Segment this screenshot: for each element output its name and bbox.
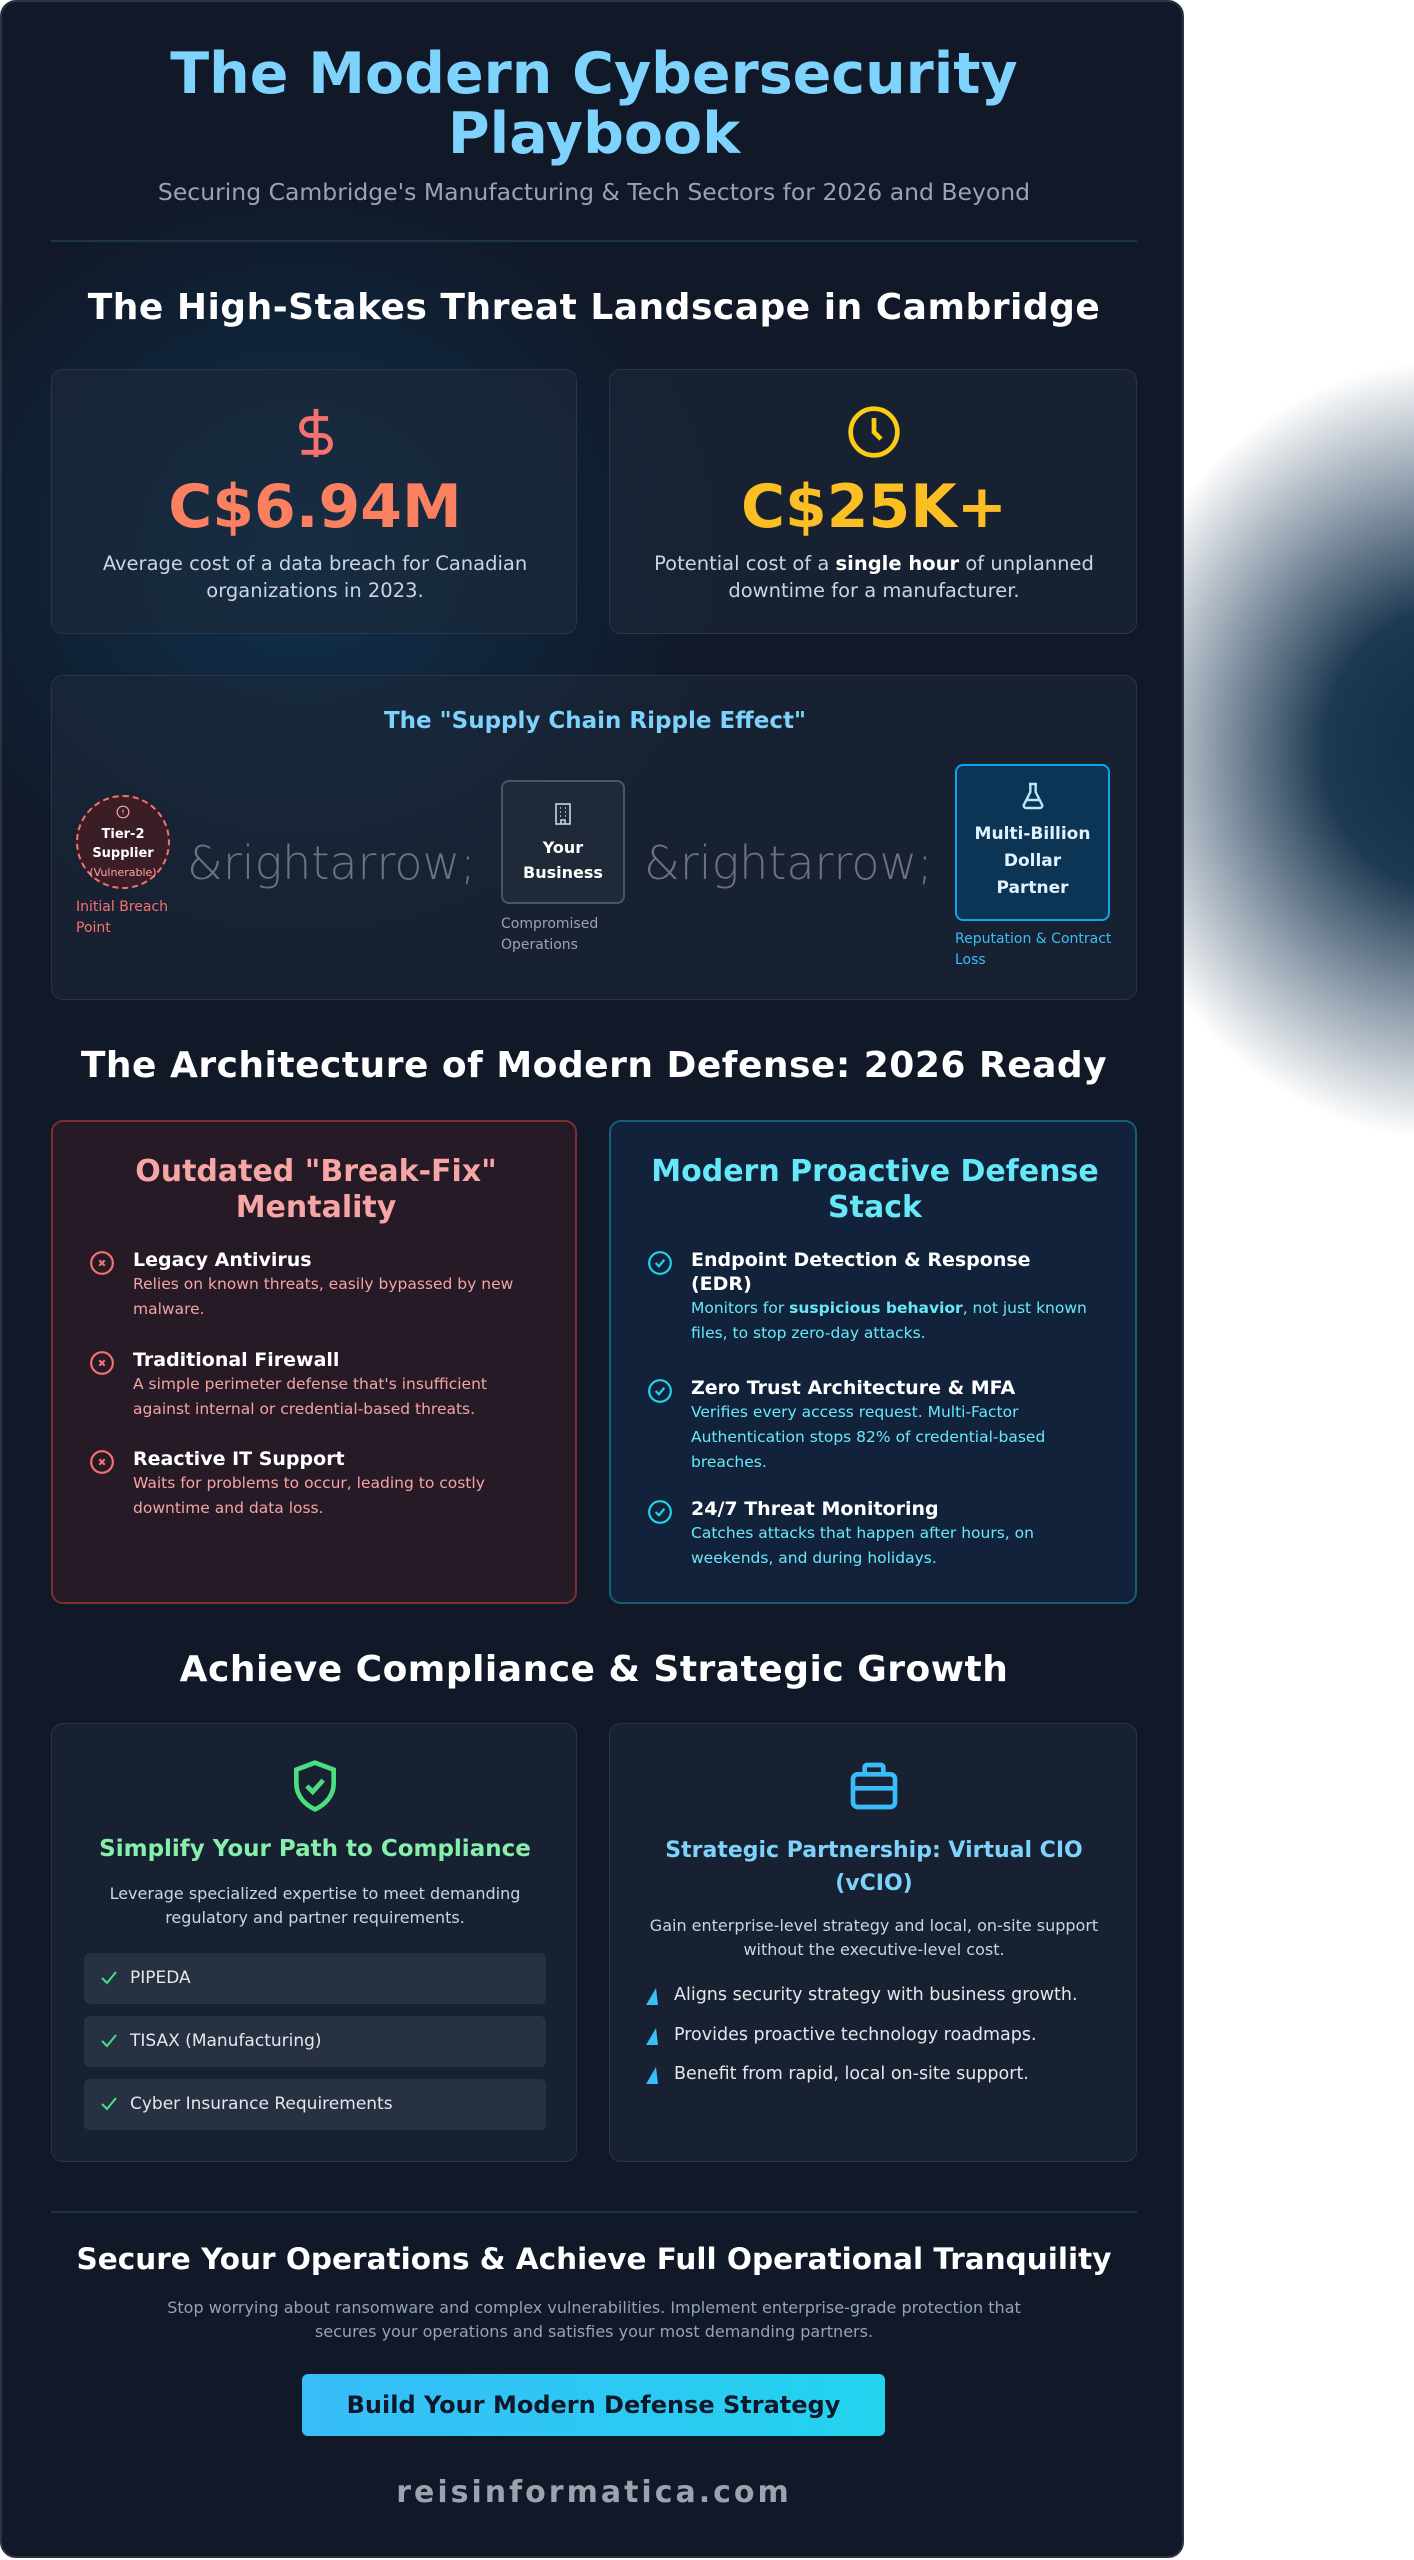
- description: [110, 1884, 520, 1927]
- item: reactive IT: Waits for problems to occur, leading to costly downtime and data loss.: [133, 1474, 485, 1517]
- caption: Reputation & Contract: [955, 931, 1111, 947]
- panel title: Stack: [828, 1190, 922, 1225]
- arrow: &rightarrow;: [187, 836, 476, 890]
- item: reactive IT: [90, 1448, 485, 1517]
- panel: supply chain ripple: [51, 675, 1137, 1000]
- description: Gain enterprise-level strategy and local, on-site support: [650, 1916, 1098, 1935]
- panel: compliance: [51, 1723, 577, 2162]
- CTA button: Build Your Modern Defense Strategy: [347, 2391, 840, 2419]
- panel title: [665, 1838, 1083, 1896]
- caption: [76, 899, 168, 936]
- node: partner: [955, 764, 1110, 921]
- caption: [501, 916, 598, 953]
- caption: Loss: [955, 952, 986, 968]
- node: supplier: Tier-2: [102, 827, 144, 842]
- panel title: (vCIO): [835, 1871, 913, 1896]
- stat number: C$6.94M: [168, 472, 462, 542]
- node: your business: Business: [523, 863, 603, 882]
- icon: clock: [848, 406, 900, 458]
- item: traditional firewall: A simple perimeter defense that's insufficient against internal or credential-based threats.: [133, 1375, 487, 1418]
- panel: outdated break-fix: [51, 1120, 577, 1604]
- panel: modern proactive stack: [609, 1120, 1137, 1604]
- panel title: Simplify Your Path to Compliance: [99, 1836, 531, 1862]
- stat description: organizations in 2023.: [206, 579, 424, 602]
- CTA heading: Secure Your Operations & Achieve Full Operational Tranquility: [77, 2242, 1111, 2276]
- panel title: [651, 1154, 1099, 1225]
- CTA description: [167, 2298, 1021, 2341]
- item: reactive IT: Reactive IT Support: [133, 1448, 345, 1470]
- item: traditional firewall: [90, 1349, 487, 1418]
- arrow: &rightarrow;: [644, 836, 933, 890]
- node: partner: Dollar: [1004, 851, 1061, 871]
- stat description: [103, 552, 527, 602]
- CTA description: Stop worrying about ransomware and complex vulnerabilities. Implement enterprise-grade protection that: [167, 2298, 1021, 2317]
- title: Playbook: [448, 101, 740, 167]
- caption: Point: [76, 920, 111, 936]
- icon: briefcase: [850, 1762, 898, 1810]
- item: traditional firewall: Traditional Firewall: [133, 1349, 339, 1371]
- icon: dollar: [299, 408, 333, 458]
- item: legacy antivirus: Legacy Antivirus: [133, 1249, 312, 1271]
- caption: [955, 931, 1112, 968]
- node: partner: Multi-Billion: [975, 824, 1090, 844]
- node: partner: Partner: [996, 878, 1068, 898]
- heading: compliance: Achieve Compliance & Strategic Growth: [180, 1649, 1008, 1690]
- panel title: The "Supply Chain Ripple Effect": [384, 708, 806, 734]
- caption: Operations: [501, 937, 578, 953]
- bullet: Provides proactive technology roadmaps.: [674, 2025, 1037, 2045]
- stat card: downtime: [609, 369, 1137, 634]
- panel: vCIO: [609, 1723, 1137, 2162]
- item: TISAX: [84, 2016, 546, 2067]
- item: 24/7 monitoring: Catches attacks that happen after hours, on weekends, and during holidays.: [691, 1524, 1034, 1567]
- item: PIPEDA: [84, 1953, 546, 2004]
- item: cyber insurance: Cyber Insurance Requirements: [130, 2094, 393, 2114]
- stat description: Potential cost of a single hour of unplanned: [654, 552, 1094, 575]
- item: EDR: Monitors for suspicious behavior, not just known files, to stop zero-day attacks.: [691, 1299, 1087, 1342]
- description: regulatory and partner requirements.: [165, 1908, 465, 1927]
- node: supplier: Supplier: [92, 846, 154, 861]
- description: Leverage specialized expertise to meet demanding: [110, 1884, 520, 1903]
- item: zero trust: Zero Trust Architecture & MFA: [691, 1377, 1015, 1399]
- stat description: Average cost of a data breach for Canadian: [103, 552, 527, 575]
- panel title: [135, 1154, 497, 1225]
- icon: shield: [294, 1760, 336, 1812]
- item: EDR: (EDR): [691, 1273, 752, 1295]
- list: compliance items: [84, 1953, 546, 2130]
- item: PIPEDA: PIPEDA: [130, 1968, 191, 1988]
- item: zero trust: [648, 1377, 1045, 1471]
- caption: Compromised: [501, 916, 598, 932]
- panel title: Outdated "Break-Fix": [135, 1154, 497, 1189]
- node: your business: Your: [543, 838, 583, 857]
- node: supplier: [76, 795, 170, 889]
- description: [650, 1916, 1098, 1959]
- node: your business: [501, 780, 625, 904]
- stat description: [654, 552, 1094, 602]
- stat number: C$25K+: [741, 472, 1007, 542]
- footer URL: reisinformatica.com: [396, 2475, 792, 2510]
- CTA description: secures your operations and satisfies your most demanding partners.: [315, 2322, 873, 2341]
- bullet: Aligns security strategy with business growth.: [674, 1985, 1078, 2005]
- subtitle: Securing Cambridge's Manufacturing & Tech Sectors for 2026 and Beyond: [158, 178, 1030, 206]
- title: [170, 41, 1018, 167]
- node: supplier: (Vulnerable): [89, 866, 157, 879]
- item: cyber insurance: [84, 2079, 546, 2130]
- item: 24/7 monitoring: [648, 1498, 1034, 1567]
- panel title: Modern Proactive Defense: [651, 1154, 1099, 1189]
- item: EDR: [648, 1249, 1087, 1342]
- item: TISAX: TISAX (Manufacturing): [130, 2031, 322, 2051]
- item: EDR: Endpoint Detection & Response: [691, 1249, 1031, 1271]
- panel title: Strategic Partnership: Virtual CIO: [665, 1838, 1083, 1863]
- item: legacy antivirus: [90, 1249, 513, 1318]
- heading: architecture: The Architecture of Modern Defense: 2026 Ready: [81, 1045, 1107, 1086]
- list: vCIO benefits: [646, 1985, 1078, 2084]
- heading: threat landscape: The High-Stakes Threat Landscape in Cambridge: [88, 287, 1100, 328]
- item: zero trust: Verifies every access request. Multi-Factor Authentication stops 82% of credential-based breaches.: [691, 1403, 1045, 1471]
- item: 24/7 monitoring: 24/7 Threat Monitoring: [691, 1498, 939, 1520]
- caption: Initial Breach: [76, 899, 168, 915]
- item: legacy antivirus: Relies on known threats, easily bypassed by new malware.: [133, 1275, 513, 1318]
- stat card: breach cost: [51, 369, 577, 634]
- title: The Modern Cybersecurity: [170, 41, 1018, 107]
- panel title: Mentality: [236, 1190, 396, 1225]
- bullet: Benefit from rapid, local on-site support.: [674, 2064, 1029, 2084]
- stat description: downtime for a manufacturer.: [728, 579, 1020, 602]
- CTA button: [302, 2374, 885, 2436]
- description: without the executive-level cost.: [743, 1940, 1005, 1959]
